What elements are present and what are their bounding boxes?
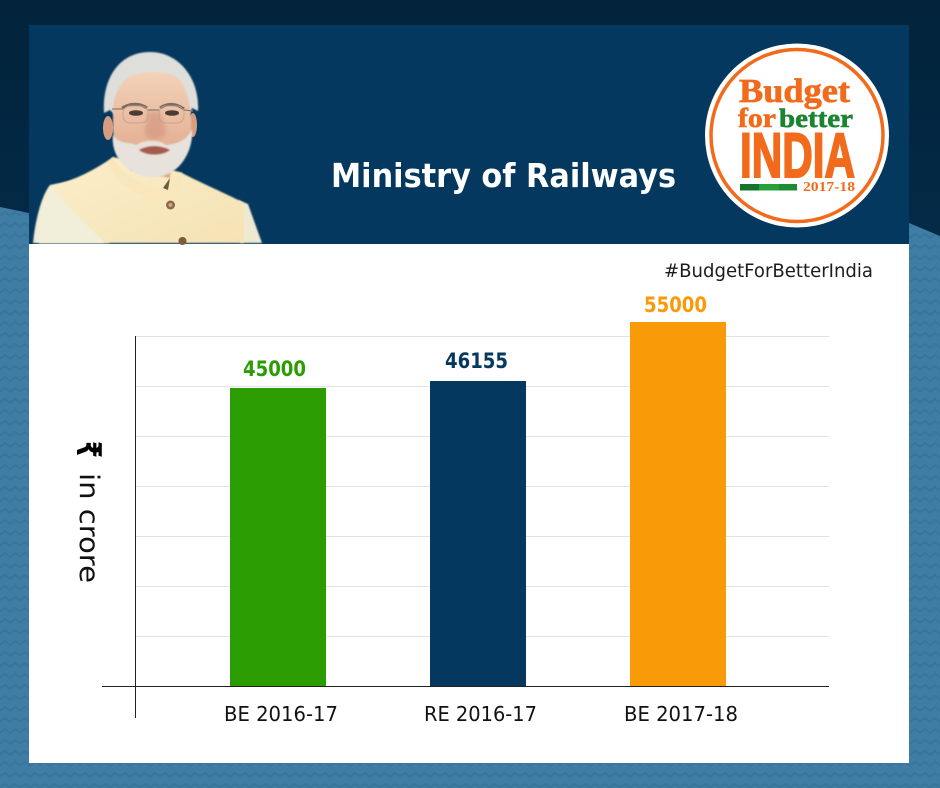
placket shade: [163, 178, 170, 190]
badge: Budget for better India: [705, 44, 889, 228]
vest: [40, 157, 244, 243]
label: BE 2017-18: BE 2017-18: [624, 702, 738, 726]
portrait illustration: [33, 52, 262, 245]
neck: [125, 150, 172, 178]
bar: BE 2017-18: [630, 322, 726, 686]
glasses: [112, 109, 193, 111]
buttons: [166, 200, 175, 210]
title: Ministry of Railways: [331, 156, 676, 195]
grid lines: [135, 336, 829, 636]
header panel: [29, 25, 909, 244]
ears: [103, 116, 113, 140]
badge: Budget for better India: for: [738, 103, 776, 133]
hair: [104, 52, 198, 114]
badge: Budget for better India: 2017-18: [803, 180, 855, 195]
value: 45000: 45000: [243, 357, 306, 381]
background: dark top band: [0, 0, 940, 236]
label: BE 2016-17: BE 2016-17: [224, 702, 338, 726]
label: RE 2016-17: RE 2016-17: [424, 702, 537, 726]
y-axis title: in crore: [73, 473, 104, 583]
bar chart: [102, 293, 829, 726]
eyebrows: [122, 104, 147, 108]
eyes: [129, 110, 143, 116]
face: [113, 72, 191, 170]
white content panel: [29, 244, 909, 763]
bar: RE 2016-17: [430, 381, 526, 686]
value: 55000: 55000: [644, 293, 707, 317]
y-axis title: ₹: [68, 441, 108, 458]
badge: Budget for better India: Budget: [739, 73, 851, 110]
bar: BE 2016-17: [230, 388, 326, 686]
nose shade: [145, 112, 166, 139]
badge: Budget for better India: INDIA: [740, 121, 855, 191]
badge: Budget for better India: better: [779, 104, 853, 133]
collar: [108, 157, 182, 201]
y-axis title: [68, 441, 108, 583]
axes: [102, 336, 829, 718]
hashtag: #BudgetForBetterIndia: [664, 260, 873, 282]
beard: [113, 129, 192, 177]
mouth: [139, 146, 170, 154]
value: 46155: 46155: [445, 349, 508, 373]
kurta sleeves: [33, 180, 110, 243]
